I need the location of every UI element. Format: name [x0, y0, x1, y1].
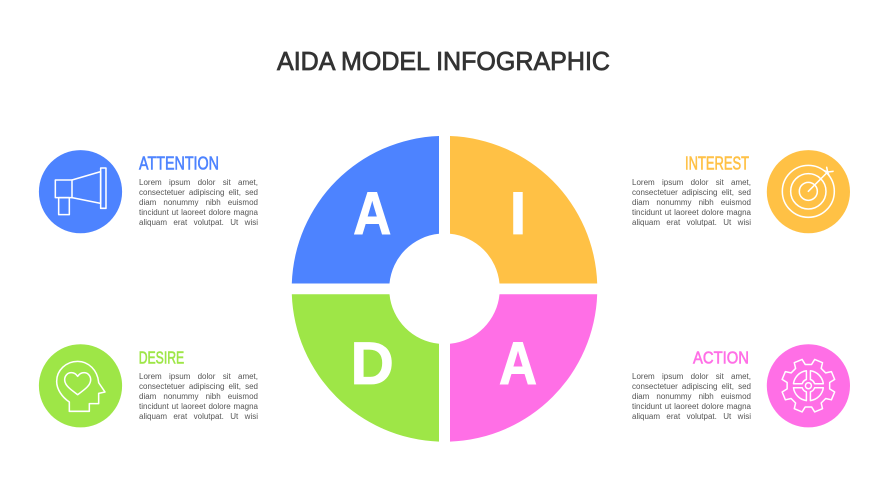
heading: attention: ATTENTION	[139, 153, 219, 173]
text: attention description	[139, 178, 258, 227]
text: desire description: Lorem ipsum dolor sit amet,	[139, 372, 258, 381]
panel: action	[632, 344, 850, 428]
icon: megaphone	[39, 150, 122, 233]
icon: target	[767, 150, 850, 233]
text: action description: diam nonummy nibh euismod	[632, 392, 751, 401]
text: interest description	[632, 178, 751, 227]
segment: D desire: D	[350, 330, 394, 397]
segment: I interest: I	[510, 180, 526, 247]
text: interest description: Lorem ipsum dolor sit amet,	[632, 178, 751, 187]
text: interest description: tincidunt ut laoreet dolore magna	[632, 208, 751, 217]
segment: I interest	[450, 136, 597, 284]
segment: D desire	[292, 294, 439, 442]
text: action description	[632, 372, 751, 421]
panel: desire	[38, 344, 258, 428]
icon: head with heart	[39, 344, 122, 427]
segment: A attention	[292, 136, 439, 284]
text: desire description: consectetuer adipiscing elit, sed	[139, 382, 258, 391]
text: action description: aliquam erat volutpat. Ut wisi	[632, 412, 751, 421]
title: AIDA MODEL INFOGRAPHIC	[277, 46, 610, 76]
text: interest description: consectetuer adipiscing elit, sed	[632, 188, 751, 197]
heading: desire: DESIRE	[139, 348, 184, 368]
text: attention description: aliquam erat volutpat. Ut wisi	[139, 218, 258, 227]
panel: attention	[38, 150, 258, 234]
panel: interest	[632, 150, 850, 234]
text: attention description: consectetuer adipiscing elit, sed	[139, 188, 258, 197]
segment: A action	[450, 294, 597, 442]
text: action description: tincidunt ut laoreet dolore magna	[632, 402, 751, 411]
heading: interest: INTEREST	[685, 153, 749, 173]
heading: action: ACTION	[693, 348, 749, 368]
icon: gear	[767, 344, 850, 427]
segment: A action: A	[499, 330, 537, 397]
text: desire description: aliquam erat volutpat. Ut wisi	[139, 412, 258, 421]
text: interest description: aliquam erat volutpat. Ut wisi	[632, 218, 751, 227]
text: attention description: tincidunt ut laoreet dolore magna	[139, 208, 258, 217]
text: action description: consectetuer adipiscing elit, sed	[632, 382, 751, 391]
text: desire description	[139, 372, 258, 421]
text: desire description: diam nonummy nibh euismod	[139, 392, 258, 401]
segment: A attention: A	[353, 180, 391, 247]
text: attention description: Lorem ipsum dolor sit amet,	[139, 178, 258, 187]
text: interest description: diam nonummy nibh euismod	[632, 198, 751, 207]
text: action description: Lorem ipsum dolor sit amet,	[632, 372, 751, 381]
chart: AIDA quadrant ring	[292, 136, 598, 442]
text: attention description: diam nonummy nibh euismod	[139, 198, 258, 207]
text: desire description: tincidunt ut laoreet dolore magna	[139, 402, 258, 411]
